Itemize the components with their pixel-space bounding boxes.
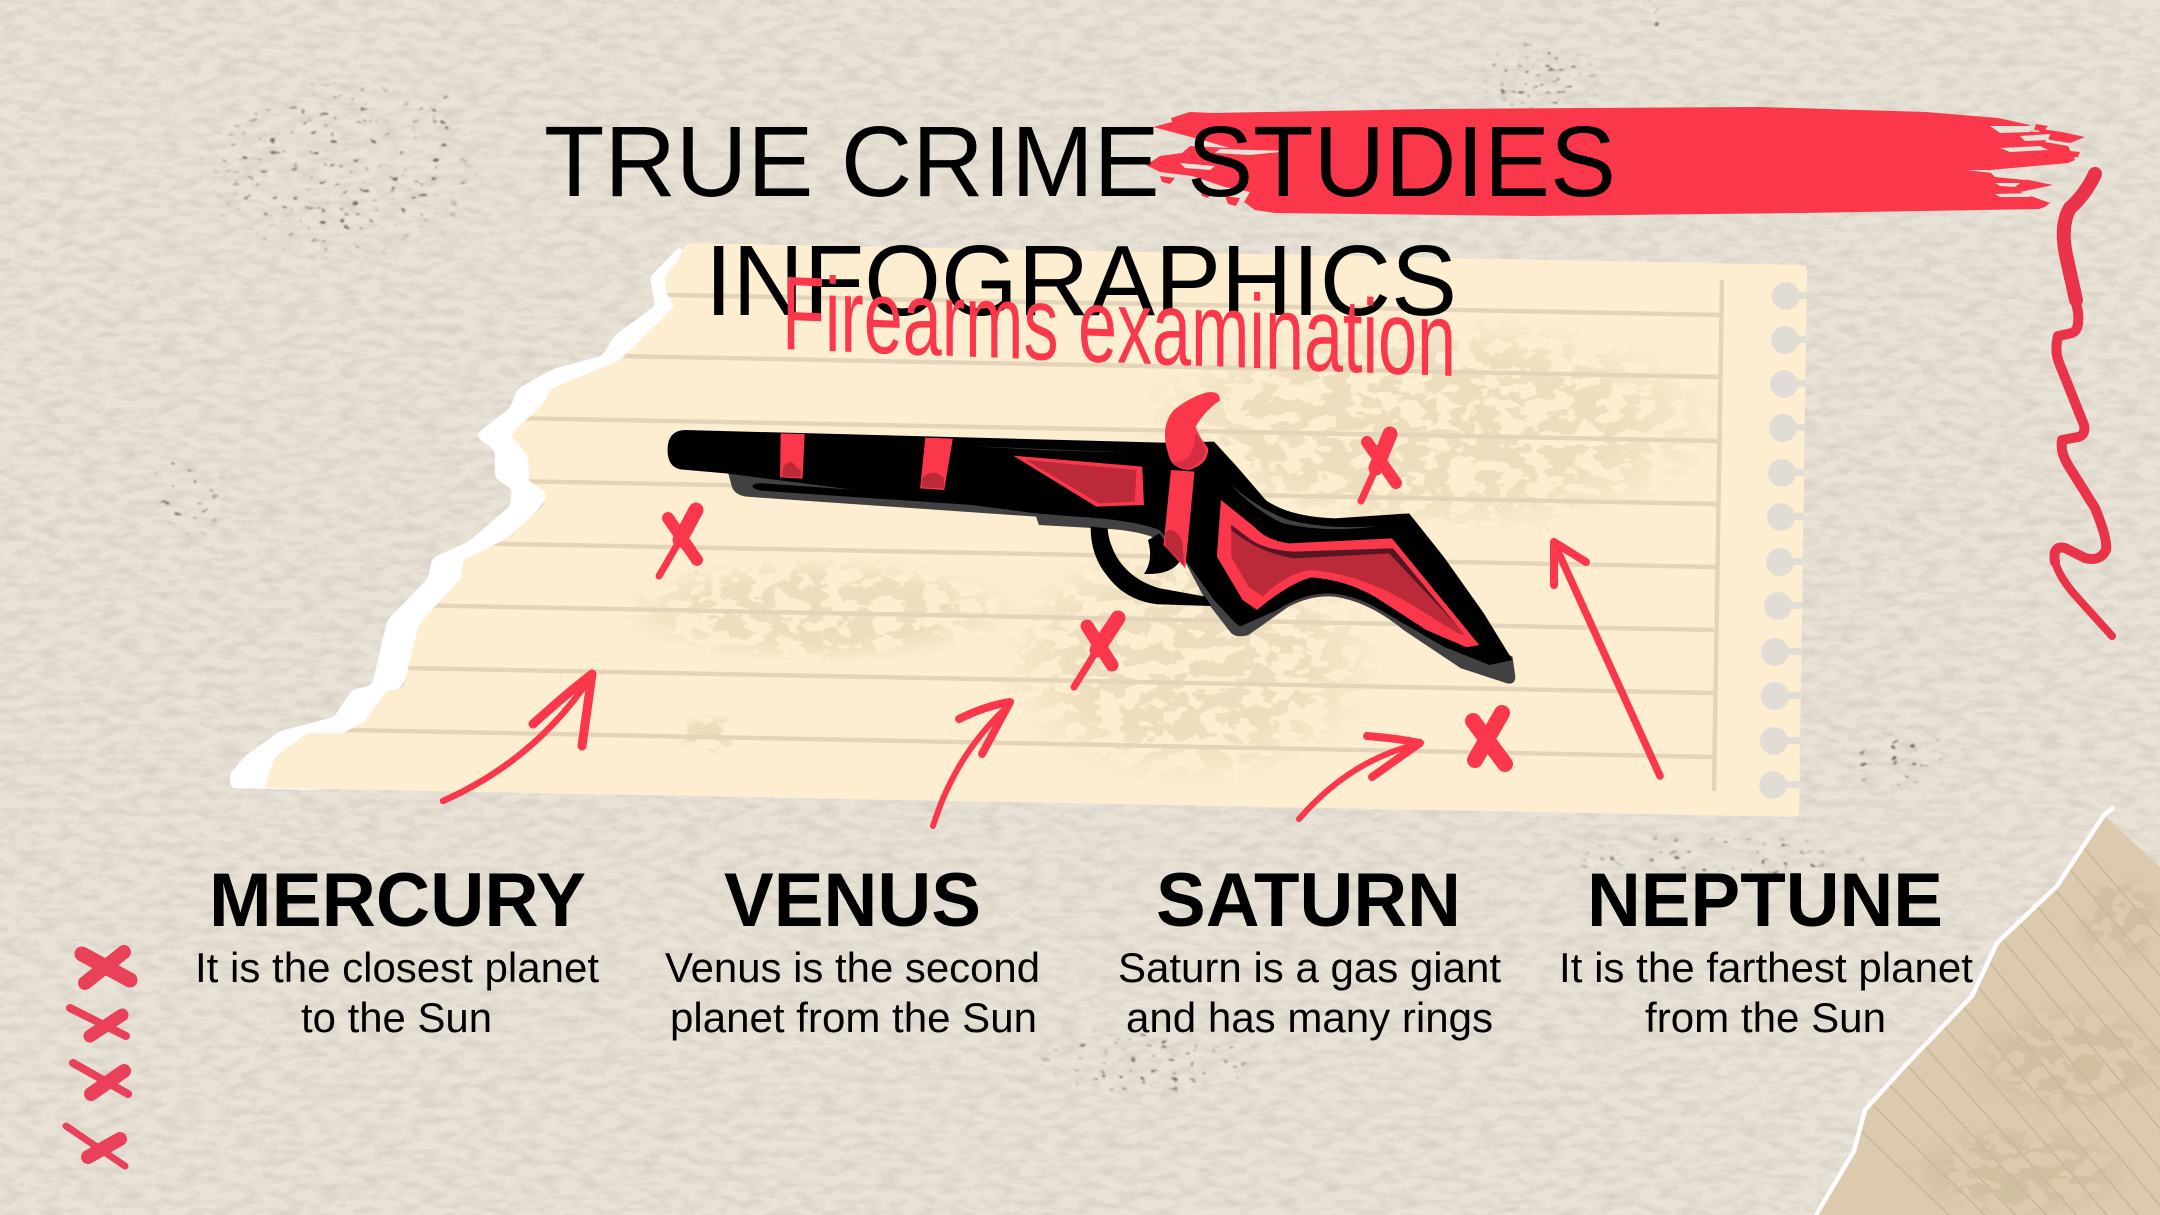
red brush stroke behind title [1146,107,2085,216]
arrow: venus [933,702,1010,826]
label: saturn: SATURN [1156,858,1461,943]
label: saturn: and has many rings [1126,994,1493,1041]
label: venus [665,858,1040,1041]
label: venus: Venus is the second [665,944,1040,991]
label: neptune: It is the farthest planet [1559,944,1973,991]
label: mercury: It is the closest planet [195,944,599,991]
label: mercury: to the Sun [301,994,492,1041]
icon: left x marks column [66,952,130,1166]
arrow: neptune [1554,542,1660,776]
icon: flintlock gun [668,392,1515,684]
icon: x mark 2 [1361,434,1396,501]
label: neptune [1559,858,1973,1041]
title: INFOGRAPHICS [705,225,1457,337]
label: mercury [195,858,599,1041]
arrow: saturn [1299,736,1420,819]
arrow: mercury [443,674,592,801]
panel: torn lined note paper [264,243,1810,817]
label: venus: planet from the Sun [670,994,1037,1041]
brush dry streaks [1180,126,2050,197]
icon: x mark 3 [1074,618,1118,687]
icon: x mark 4 [1473,713,1505,764]
label: neptune: from the Sun [1645,994,1886,1041]
label: saturn: Saturn is a gas giant [1118,944,1501,991]
label: neptune: NEPTUNE [1587,858,1943,943]
torn paper white backing [230,245,700,790]
label: saturn [1118,858,1501,1041]
icon: x mark 1 [659,510,697,576]
title [544,106,1616,337]
red squiggle line [2054,172,2112,636]
label: mercury: MERCURY [209,858,586,943]
subtitle: Firearms examination: Firearms examination [782,255,1456,399]
title: TRUE CRIME STUDIES [544,106,1616,218]
label: venus: VENUS [724,858,981,943]
panel: torn paper corner [1816,807,2160,1215]
